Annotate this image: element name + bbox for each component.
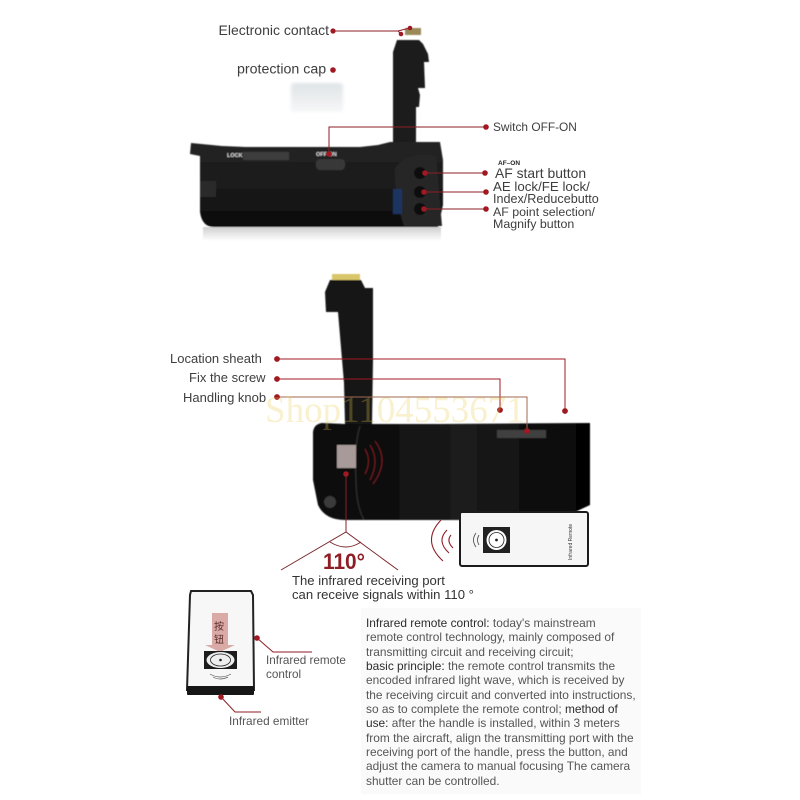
callout: AF point selection [421,205,595,231]
callout: AF point selection: Magnify button [493,217,574,231]
callout: protection cap: protection cap [237,62,326,78]
panel: infrared description: from the aircraft, align the transmitting port with the [366,731,634,745]
blue icons [393,189,402,214]
receiving angle diagram [281,471,398,574]
grip column [325,280,373,424]
press arrow [205,613,235,652]
photo: top battery grip [190,28,443,241]
panel: infrared description: receiving port of the handle, press the button, and [366,745,628,759]
callout: electronic contact [218,22,412,38]
remote front view [187,591,254,695]
infrared port note [292,573,474,602]
callout: infrared remote control [254,635,346,681]
receiver window [337,445,356,468]
grip reflection [203,227,441,241]
callout: fix the screw: Fix the screw [189,370,266,385]
callout: switch off-on [326,120,577,157]
callout: AF start button [422,160,586,181]
callout: infrared emitter: Infrared emitter [229,714,309,728]
infrared port note: The infrared receiving port [292,573,445,588]
grip column [393,40,429,146]
callout: AE lock [421,179,599,206]
callout: switch off-on: Switch OFF-ON [493,120,577,134]
dial [243,152,289,160]
panel: infrared description: the receiving circuit and converted into instructions, [366,688,636,702]
callout: location sheath: Location sheath [170,351,262,366]
panel: infrared description: use: after the handle is installed, within 3 meters [366,716,620,730]
panel: infrared description: remote control technology, mainly composed of [366,630,615,644]
buttons [414,167,426,179]
button panel [395,154,442,226]
gold contacts [405,28,421,35]
gold contacts [332,274,360,280]
lock label: LOCK [227,153,243,159]
emitter window [204,651,237,669]
watermark: Shop1104553671 [265,390,525,431]
remote front view: 钮 [214,633,224,646]
protection cap [291,83,343,112]
side panel curve [356,426,364,520]
switch label: OFF ON [316,152,337,158]
grip body [313,423,590,520]
panel: infrared description: basic principle: the remote control transmits the [366,659,616,673]
dial [497,430,546,438]
panel: infrared description: transmitting circuit and receiving circuit; [366,645,574,659]
remote side view [460,512,588,566]
callout: infrared remote control: Infrared remote [266,654,346,667]
callout: handling knob: Handling knob [183,390,266,405]
panel: infrared description: Infrared remote control: today's mainstream [366,616,596,630]
callout: location sheath [170,351,568,414]
photo: rear battery grip [313,274,590,520]
remote front view: 按 [214,620,224,633]
110 degrees label: 110° [323,549,365,574]
grip body [190,142,443,227]
callout: AF start button: AF–ON [498,160,520,167]
panel: infrared description: so as to complete the remote control; method of [366,702,619,716]
callout: infrared emitter [218,694,309,728]
panel: infrared description: adjust the camera to manual focusing The camera [366,759,631,773]
remote side view: Infrared Remote [568,524,574,560]
callout: AE lock: AE lock/FE lock/ [493,179,590,194]
infrared port note: can receive signals within 110 ° [292,587,474,602]
callout: handling knob [183,390,530,434]
signal waves [431,520,453,561]
switch [316,159,345,170]
panel: infrared description: shutter can be controlled. [366,774,500,788]
callout: electronic contact: Electronic contact [218,22,329,38]
callout: AF point selection: AF point selection/ [493,205,595,219]
callout: AF start button: AF start button [495,165,586,181]
signal arcs [365,441,382,484]
callout: fix the screw [189,370,503,413]
door [200,181,216,197]
panel: infrared description: encoded infrared light wave, which is received by [366,673,624,687]
lens port [324,496,336,508]
callout: infrared remote control: control [266,668,301,681]
callout: AE lock: Index/Reducebutto [493,192,599,206]
panel: infrared description [361,608,641,794]
